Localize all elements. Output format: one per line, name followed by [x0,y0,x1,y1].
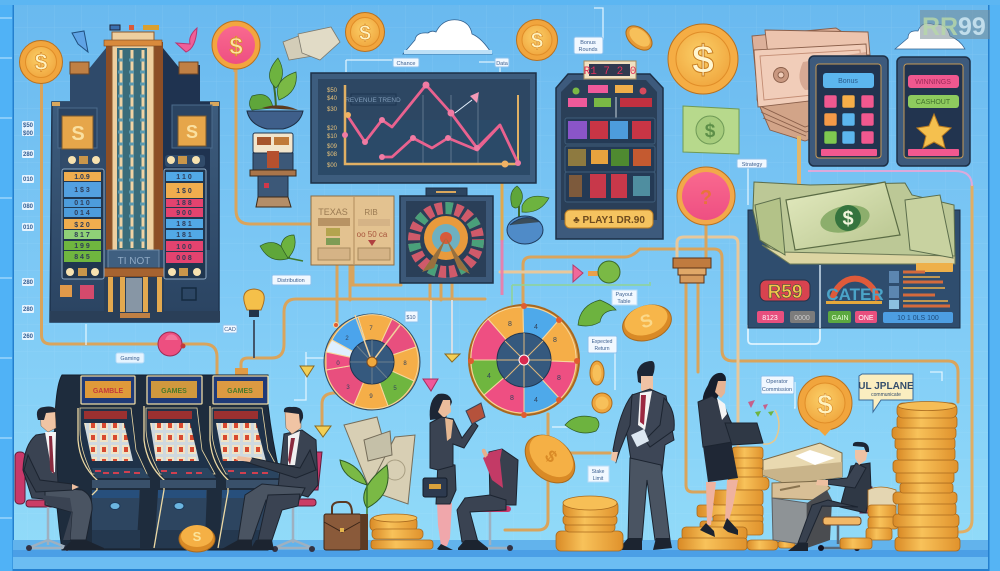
panel: casino tower: 1 1 0 [176,174,192,181]
coin pile behind stack [840,487,898,549]
chart panel: $00 [327,163,338,169]
wheel: right: 8 [508,321,512,328]
chart panel: $08 [327,152,338,158]
star card: WINNINGS [915,79,951,86]
slot machines: GAMBLE [93,388,123,395]
label chip [405,311,418,322]
arrows down [300,300,460,437]
wheel: left [324,314,420,410]
wheel: left: 5 [393,386,397,392]
wheel: right: 4 [534,324,538,331]
label chip [612,290,637,305]
icon: cash and plant [340,417,415,514]
chip labels small: Operator [766,379,788,385]
coin stack: under woman [678,447,795,550]
coin stack: tall right [892,402,960,551]
calculator [809,56,888,166]
scale labels left: 080 [23,204,34,210]
panel: casino tower: 9 0 0 [176,210,192,217]
wheel: left: 3 [346,385,350,391]
panel: casino tower: S [186,122,198,142]
roulette screen [400,188,493,283]
chart panel: $09 [327,144,338,150]
coin: pink [212,21,260,72]
panel: casino tower: TI NOT [118,256,150,267]
tilted coin [621,21,657,55]
coin: top right small: $ [531,28,543,53]
slot panel: ♣ PLAY1 DR.90 [573,215,645,226]
machine 2 [155,490,207,540]
panel: casino tower: 0 0 8 [176,255,192,262]
chip labels small [116,275,794,394]
scale labels left: 280 [23,280,34,286]
label chip [737,159,767,168]
book panel: oo 50 ca [357,230,388,239]
coin stack small [556,496,623,551]
watermark: RR99 [920,10,990,41]
star card: CASHOUT [916,99,951,106]
label chip: Payout [615,292,633,298]
green cash panel: 8123 [762,315,778,322]
label chip: Table [617,299,631,305]
wings [60,48,106,250]
scale labels left: 010 [23,225,34,231]
person: standing man [611,361,674,550]
green cash panel: 0000 [794,315,810,322]
thin connectors [86,8,972,427]
green cash panel: 10 1 0LS 100 [897,315,939,322]
icon: plant in bowl [247,58,303,129]
tower [106,42,163,250]
slot machines: GAMES [161,388,187,395]
display [584,61,636,79]
coin: top-left [20,40,62,84]
scale labels left: 010 [23,177,34,183]
big coin [668,24,738,94]
wheel: left: 0 [336,361,340,367]
wheel: right: 8 [553,337,557,344]
leaf [260,235,303,261]
panel: casino tower: 8 1 7 [74,232,90,239]
pillar connector [673,258,711,283]
panel: casino tower: 0 1 0 [74,200,90,207]
plant: leaf with pot [507,186,549,244]
coin: on floor: S [193,529,202,544]
scale labels left: $00 [23,131,34,137]
wheel: left: 8 [403,361,407,367]
coin: top middle [346,12,384,52]
connector pipes [42,68,972,532]
wheel: right: 8 [510,395,514,402]
chart panel: $40 [327,96,338,102]
coin bubble and speech bubble: UL JPLANE [858,381,914,392]
green bill: $ [705,121,716,142]
big coin: $ [692,38,714,82]
panel: casino tower: 1 8 1 [176,232,192,239]
book panel: TEXAS [318,207,348,217]
woman with laptop [698,373,779,537]
wheel: right: 4 [534,397,538,404]
machine 3 [220,490,272,540]
wheel: left: 7 [369,326,373,332]
cloud right [895,23,965,49]
panel: casino tower: 1 $ 3 [74,187,90,194]
coin stack under plant [370,514,433,549]
label chips: chart: Chance [397,61,415,67]
pink money stack [752,28,870,141]
label chip: Strategy [742,162,762,168]
coin: pink question: ? [700,187,712,209]
person: standing woman [423,394,485,550]
label chip: Return [594,346,610,352]
coin: pink: $ [229,33,243,60]
icon: light bulb [244,289,264,358]
coin bubble and speech bubble: communicate [871,392,901,398]
person: seated man with hands up [457,449,518,551]
label chip: Stake [592,469,605,475]
label chip: Limit [593,476,604,482]
chip labels small: CAD [224,327,236,333]
green cash panel [748,182,960,328]
machine 1 [92,490,140,540]
icon: briefcase [324,502,368,550]
panel: casino tower: $ 2 0 [74,222,90,229]
coin: top-left: $ [35,49,48,75]
panel: casino tower: 1 8 8 [176,200,192,207]
label chip: top [574,37,603,54]
chart panel: $20 [327,126,338,132]
watermark: RR99: RR [922,13,958,41]
chart panel: $50 [327,88,338,94]
label chip: top: Rounds [579,47,598,53]
coin: tilted lower: $ [541,446,561,467]
slot machines [54,368,282,550]
slot panel: R1 7 2 0 [584,66,636,78]
chart panel [311,73,536,183]
stem [797,136,801,186]
star card [897,57,970,166]
wheel: left: 2 [345,336,349,342]
cloud [403,20,492,54]
label chip [588,466,609,482]
chart panel: $30 [327,107,338,113]
wheel: right: 8 [557,375,561,382]
label chip [588,336,617,353]
wheel: right: 4 [487,373,491,380]
panel: casino tower: 1 0 0 [176,244,192,251]
slot machines: GAMES [227,388,253,395]
scale labels left: 280 [23,152,34,158]
person: seated man right [220,407,322,552]
green cash panel: GAIN [831,315,849,322]
label chip: Expected [592,339,613,345]
label chip: top: Bonus [580,40,596,46]
panel: casino tower [50,25,220,322]
green cash panel: CATER [826,285,884,304]
icon: small machine [250,133,296,207]
green cash panel: ONE [858,315,874,322]
coin: pink question [677,167,735,260]
arrows top-left [72,28,197,52]
wheel: left: 9 [369,394,373,400]
cash bundle and desk [763,443,842,548]
panel: casino tower: 1 9 9 [74,243,90,250]
coin: on floor [179,525,215,552]
scale labels left [22,121,34,340]
coin: tilted lower [516,425,584,493]
panel: casino tower: 1 8 1 [176,221,192,228]
green cash panel: R59 [768,282,802,303]
person: seated man with desk [788,442,872,551]
small coins + leaf [565,361,612,433]
coin: large tilted [618,299,676,347]
label chips: chart: Data [496,61,509,67]
panel: casino tower: 8 4 5 [74,254,90,261]
panel: casino tower: 1 $ 0 [176,188,192,195]
panel: casino tower: S [71,123,85,145]
floor [13,540,988,571]
chart panel: REVENUE TREND [345,97,401,104]
right column [172,105,212,148]
game logo [760,280,810,301]
coin bubble and speech bubble [798,374,914,436]
label chips: chart [393,58,509,67]
green cash panel: $ [842,208,854,230]
arrow with green ball [573,261,620,283]
panel: casino tower: 1.0.9 [74,174,90,181]
calculator: Bonus [838,78,858,85]
label chip: $10 [406,315,416,321]
chip labels small: Gaming [120,356,140,362]
leaf [578,300,616,326]
left column [58,108,97,148]
chip labels small: Distribution [277,278,305,284]
chart panel: $10 [327,134,338,140]
book panel [311,196,394,265]
scale labels left: $50 [23,123,34,129]
wheel: right [468,303,580,418]
coin: top middle: $ [359,22,371,45]
green bill [683,106,739,154]
scale labels left: 280 [23,307,34,313]
scale labels left: 260 [23,334,34,340]
coin: large tilted: S [638,310,655,332]
slot panel [556,61,663,239]
watermark: RR99: 99 [958,13,986,41]
panel: casino tower: 0 1 4 [74,210,90,217]
coin: top right small [516,20,558,60]
coin bubble and speech bubble: $ [817,389,833,420]
person: seated man left [15,407,104,551]
chip labels small: Commission [762,387,792,393]
pink ball valve [158,332,186,356]
book panel: RIB [364,208,378,217]
icon: paper bills [283,27,340,60]
